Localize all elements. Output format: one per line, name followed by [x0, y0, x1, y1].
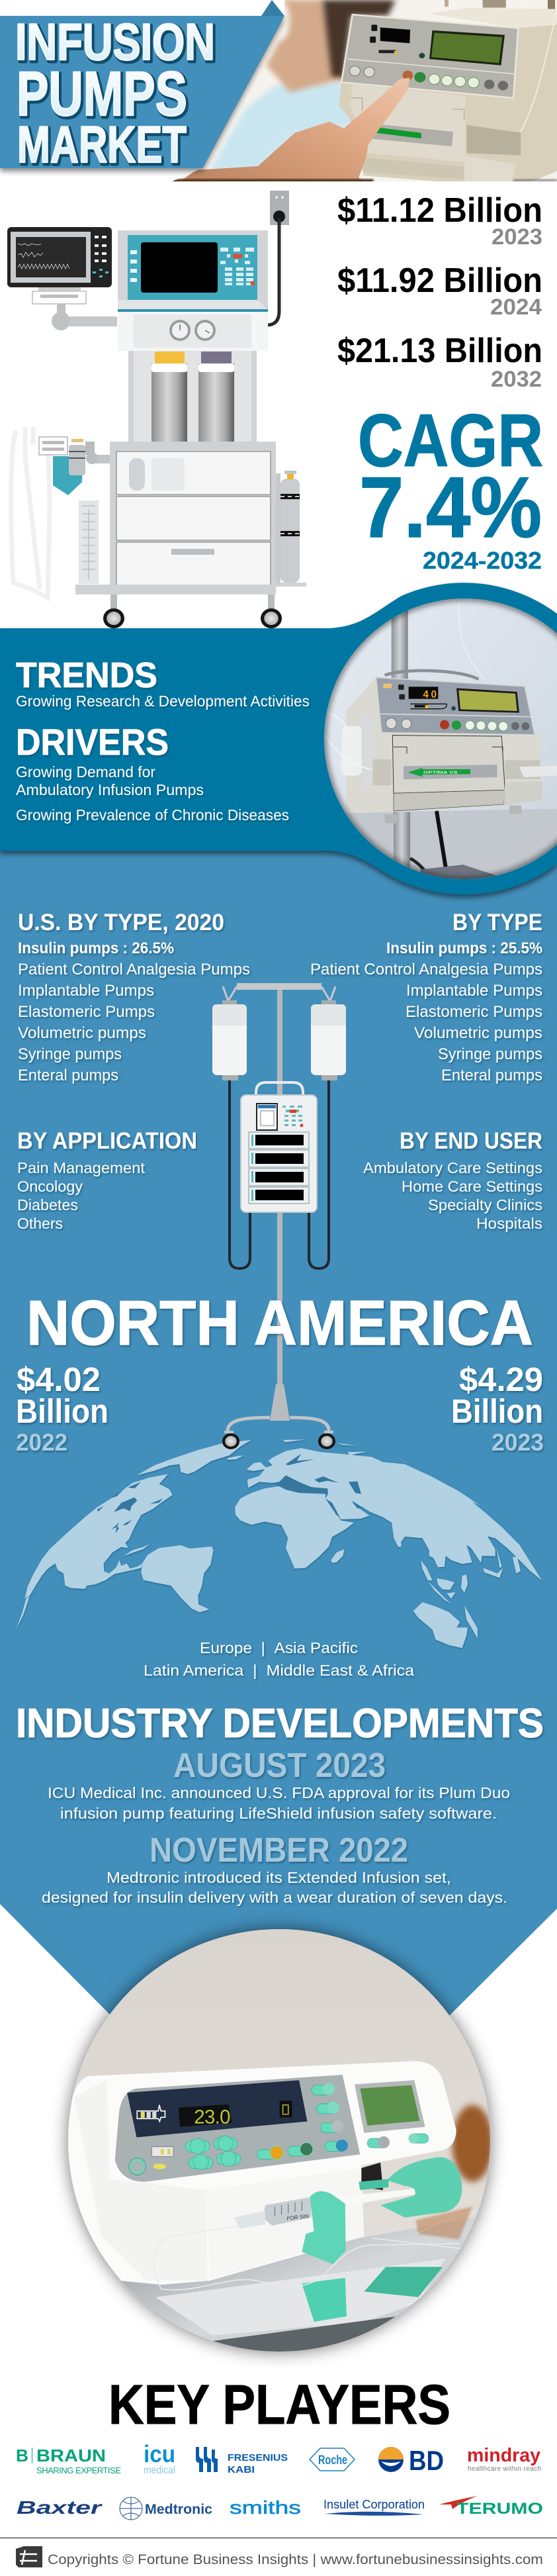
- US by type list: Elastomeric Pumps: [18, 1003, 155, 1021]
- title banner: [0, 13, 284, 175]
- logo: Insulet Corporation: Insulet Corporation: [323, 2498, 425, 2511]
- photo: infusion pump on pole: OPTIMA VS: [423, 771, 458, 775]
- logo: Fresenius Kabi: [196, 2447, 288, 2475]
- photo: infusion pump on pole: 40: [423, 689, 437, 700]
- title banner: PUMPS: [19, 61, 189, 131]
- development: November 2022: designed for insulin delivery with a wear duration of seven days.: [42, 1889, 507, 1906]
- logo: Fresenius Kabi: FRESENIUS: [228, 2452, 288, 2463]
- driver text: Growing Demand for: [16, 763, 155, 781]
- North America 2023 value: [451, 1360, 544, 1456]
- photo: infusion pump on pole: [318, 596, 557, 887]
- logo: Roche: Roche: [318, 2454, 347, 2467]
- world map: [16, 1439, 542, 1648]
- development: August 2023: infusion pump featuring LifeShield infusion safety software.: [60, 1805, 497, 1822]
- by end user list: Hospitals: [476, 1215, 542, 1232]
- other regions: Latin America | Middle East & Africa: [144, 1662, 414, 1679]
- logo: Terumo: TERUMO: [456, 2500, 543, 2518]
- global by type list: Syringe pumps: [438, 1045, 542, 1063]
- global by type list: BY TYPE: [452, 910, 542, 935]
- development: November 2022: Medtronic introduced its Extended Infusion set,: [107, 1869, 451, 1886]
- driver text: Ambulatory Infusion Pumps: [16, 781, 204, 798]
- US by type list: Insulin pumps : 26.5%: [18, 939, 174, 957]
- US by type list: Enteral pumps: [18, 1067, 118, 1084]
- title banner: INFUSION: [17, 15, 217, 73]
- by end user list: [363, 1128, 542, 1232]
- North America 2023 value: Billion: [451, 1392, 543, 1430]
- North America 2022 value: Billion: [16, 1392, 108, 1430]
- title banner: INFUSION: [15, 13, 215, 71]
- photo: syringe pump: 23.0: [194, 2107, 231, 2128]
- North America 2023 value: $4.29: [459, 1360, 543, 1398]
- driver text: [16, 763, 289, 824]
- market size figures: $11.12 Billion: [337, 191, 542, 230]
- driver text: Growing Prevalence of Chronic Diseases: [16, 806, 289, 824]
- by application list: Pain Management: [17, 1159, 146, 1176]
- logo: Mindray: healthcare within reach: [468, 2465, 541, 2473]
- logo: BD: BD: [409, 2445, 444, 2476]
- logo: Terumo: [439, 2496, 543, 2518]
- development: August 2023: AUGUST 2023: [173, 1746, 386, 1785]
- by end user list: Ambulatory Care Settings: [363, 1159, 542, 1176]
- by end user list: BY END USER: [400, 1128, 542, 1154]
- logo: BD: [378, 2445, 444, 2476]
- other regions: Europe | Asia Pacific: [200, 1639, 358, 1656]
- title banner: PUMPS: [17, 59, 187, 129]
- key players heading: KEY PLAYERS: [108, 2373, 450, 2436]
- title banner: MARKET: [19, 117, 188, 175]
- logo: ICU Medical: medical: [144, 2465, 175, 2476]
- logo: ICU Medical: icu: [144, 2440, 175, 2467]
- development: August 2023: ICU Medical Inc. announced U.S. FDA approval for its Plum Duo: [48, 1784, 510, 1801]
- photo: syringe pump: [66, 1927, 493, 2357]
- by application list: [17, 1128, 197, 1232]
- North America 2022 value: 2022: [16, 1429, 67, 1456]
- market size figures: $11.92 Billion: [337, 262, 542, 300]
- photo: syringe pump: FOR SIN: [286, 2213, 309, 2222]
- North America 2022 value: [16, 1360, 108, 1456]
- North America heading: NORTH AMERICA: [26, 1288, 533, 1359]
- by application list: Oncology: [17, 1178, 83, 1195]
- market size figures: 2023: [492, 224, 542, 250]
- US by type list: U.S. BY TYPE, 2020: [18, 910, 224, 935]
- US by type list: Implantable Pumps: [18, 982, 154, 1000]
- logo: B. Braun: BRAUN: [36, 2446, 106, 2465]
- illustration: IV stand with infusion bags and pump: [212, 983, 346, 1433]
- development: August 2023: [48, 1746, 510, 1822]
- global by type list: Implantable Pumps: [406, 982, 542, 1000]
- market size figures: $21.13 Billion: [337, 332, 542, 370]
- global by type list: Insulin pumps : 25.5%: [386, 939, 542, 957]
- CAGR callout: [358, 399, 543, 574]
- logo: Medtronic: Medtronic: [145, 2502, 212, 2517]
- icon: wall outlet and power cord: [268, 191, 289, 325]
- logo: Fresenius Kabi: KABI: [228, 2464, 255, 2475]
- US by type list: [18, 910, 250, 1084]
- CAGR callout: 2024-2032: [423, 547, 542, 574]
- header photo: nurse pressing infusion pump: [172, 0, 557, 185]
- trend text: Growing Research & Development Activities: [16, 692, 310, 710]
- stand wheels: [222, 1433, 335, 1449]
- banner shadow and fold: [0, 0, 284, 168]
- photo: syringe pump circle shadow: [68, 1929, 490, 2352]
- map inland seas: [97, 1454, 364, 1533]
- lower blue section background: [0, 851, 557, 2185]
- US by type list: Volumetric pumps: [18, 1024, 146, 1042]
- logo: Smiths: smiths: [230, 2497, 301, 2518]
- logo: Mindray: mindray: [467, 2445, 540, 2466]
- market size figures: 2032: [491, 367, 542, 392]
- by end user list: Home Care Settings: [402, 1178, 542, 1195]
- global by type list: [310, 910, 542, 1084]
- other regions: [144, 1639, 414, 1679]
- icon: Fortune Business Insights mark: [16, 2546, 42, 2567]
- North America 2022 value: $4.02: [17, 1360, 101, 1398]
- by end user list: Specialty Clinics: [428, 1196, 542, 1214]
- development: November 2022: [42, 1831, 507, 1906]
- logo: Medtronic: [120, 2497, 212, 2520]
- by application list: Diabetes: [17, 1196, 78, 1214]
- global by type list: Enteral pumps: [441, 1067, 542, 1084]
- by application list: BY APPLICATION: [17, 1128, 197, 1154]
- US by type list: Syringe pumps: [18, 1045, 122, 1063]
- logo: B. Braun: B: [16, 2446, 28, 2465]
- by application list: Others: [17, 1215, 63, 1232]
- logo: Roche: [310, 2448, 355, 2471]
- US by type list: Patient Control Analgesia Pumps: [18, 961, 250, 978]
- trends heading: TRENDS: [16, 655, 157, 695]
- logo: B. Braun: [16, 2446, 121, 2475]
- market size figures: 2024: [490, 295, 542, 320]
- global by type list: Patient Control Analgesia Pumps: [310, 961, 542, 978]
- market size figures: [337, 191, 542, 392]
- drivers heading: DRIVERS: [16, 721, 169, 763]
- CAGR callout: 7.4%: [359, 459, 542, 555]
- trends and drivers teal band: [0, 583, 557, 894]
- development: November 2022: NOVEMBER 2022: [150, 1831, 408, 1870]
- title banner: MARKET: [17, 115, 187, 173]
- global by type list: Volumetric pumps: [414, 1024, 542, 1042]
- footer copyright: Copyrights © Fortune Business Insights | www.fortunebusinessinsights.com: [48, 2552, 543, 2567]
- North America 2023 value: 2023: [492, 1429, 544, 1456]
- logo: B. Braun: SHARING EXPERTISE: [36, 2465, 121, 2475]
- logo: Baxter: Baxter: [17, 2497, 103, 2518]
- illustration: anesthesia machine: [7, 227, 306, 628]
- global by type list: Elastomeric Pumps: [406, 1003, 542, 1021]
